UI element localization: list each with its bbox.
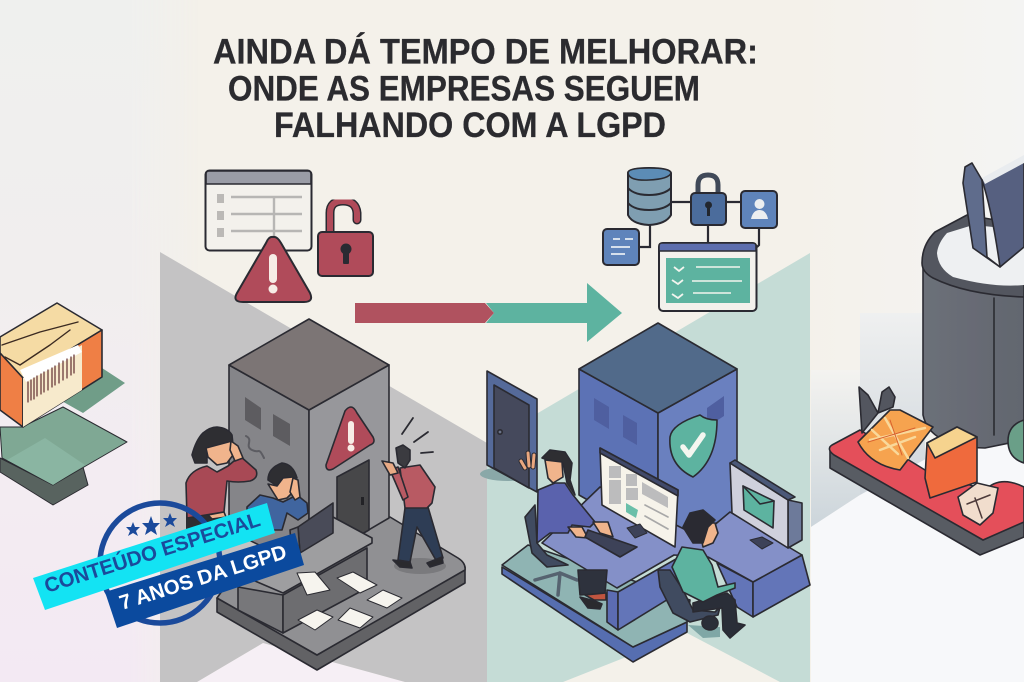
icon: database: [628, 168, 671, 225]
illustration: secure office: [480, 323, 810, 662]
scattered papers: [297, 572, 402, 630]
man working: [658, 510, 745, 638]
blue ribbon: 7 ANOS DA LGPD: [117, 541, 289, 615]
grey building: [229, 319, 389, 570]
blue building: [579, 323, 737, 560]
panicked man: [382, 418, 446, 574]
grey desk: [238, 517, 372, 633]
woman working: [537, 450, 613, 609]
second monitor: [730, 460, 802, 549]
illustration: right bin with tray: [829, 155, 1024, 555]
door: [480, 371, 537, 492]
panel: grey problem zone: [160, 252, 487, 682]
grey platform: [217, 517, 465, 670]
blue ribbon: [105, 533, 304, 628]
icon: warning triangle: [235, 237, 311, 302]
building door: [337, 460, 369, 548]
right desk base: [717, 555, 810, 617]
shield with check: [670, 415, 717, 477]
teal platform: [502, 545, 690, 662]
icon: checklist window: [659, 243, 756, 311]
man at desk: [247, 463, 308, 530]
badge ring: [100, 503, 220, 623]
desk top: [542, 487, 802, 588]
orange files: [858, 410, 998, 525]
main desk base: [607, 555, 683, 630]
illustration: distressed office: [186, 319, 465, 670]
green leaf edge: [1008, 420, 1024, 463]
discarded folder: [963, 155, 1024, 267]
red tray: [829, 430, 1024, 555]
panel: teal solution zone: [487, 253, 810, 682]
title: FALHANDO COM A LGPD: [274, 106, 666, 145]
title: AINDA DÁ TEMPO DE MELHORAR:: [213, 32, 758, 72]
icon: closed padlock: [691, 175, 726, 225]
icon: insecure data window: [206, 170, 312, 250]
dark tabs: [859, 387, 895, 433]
woman with hand on head: [186, 427, 257, 536]
illustration: left parcel on green mat: [0, 303, 127, 505]
arrow: transition from red to teal: [355, 283, 622, 342]
icon: secure data network: [603, 168, 777, 311]
bin: [922, 215, 1024, 448]
icon: user card: [741, 191, 777, 228]
icon: document card: [603, 229, 639, 265]
main monitor: [600, 448, 678, 547]
building warning sign: [326, 407, 374, 470]
office chair: [525, 505, 577, 595]
title: ONDE AS EMPRESAS SEGUEM: [228, 70, 700, 108]
laptop: [290, 503, 333, 555]
keyboard: [585, 530, 637, 557]
cyan ribbon: CONTEÚDO ESPECIAL: [41, 507, 263, 598]
icon: open padlock: [318, 201, 373, 276]
title: [213, 32, 758, 145]
badge stars: [126, 513, 177, 536]
badge: conteudo especial 7 anos da LGPD: [33, 503, 304, 628]
